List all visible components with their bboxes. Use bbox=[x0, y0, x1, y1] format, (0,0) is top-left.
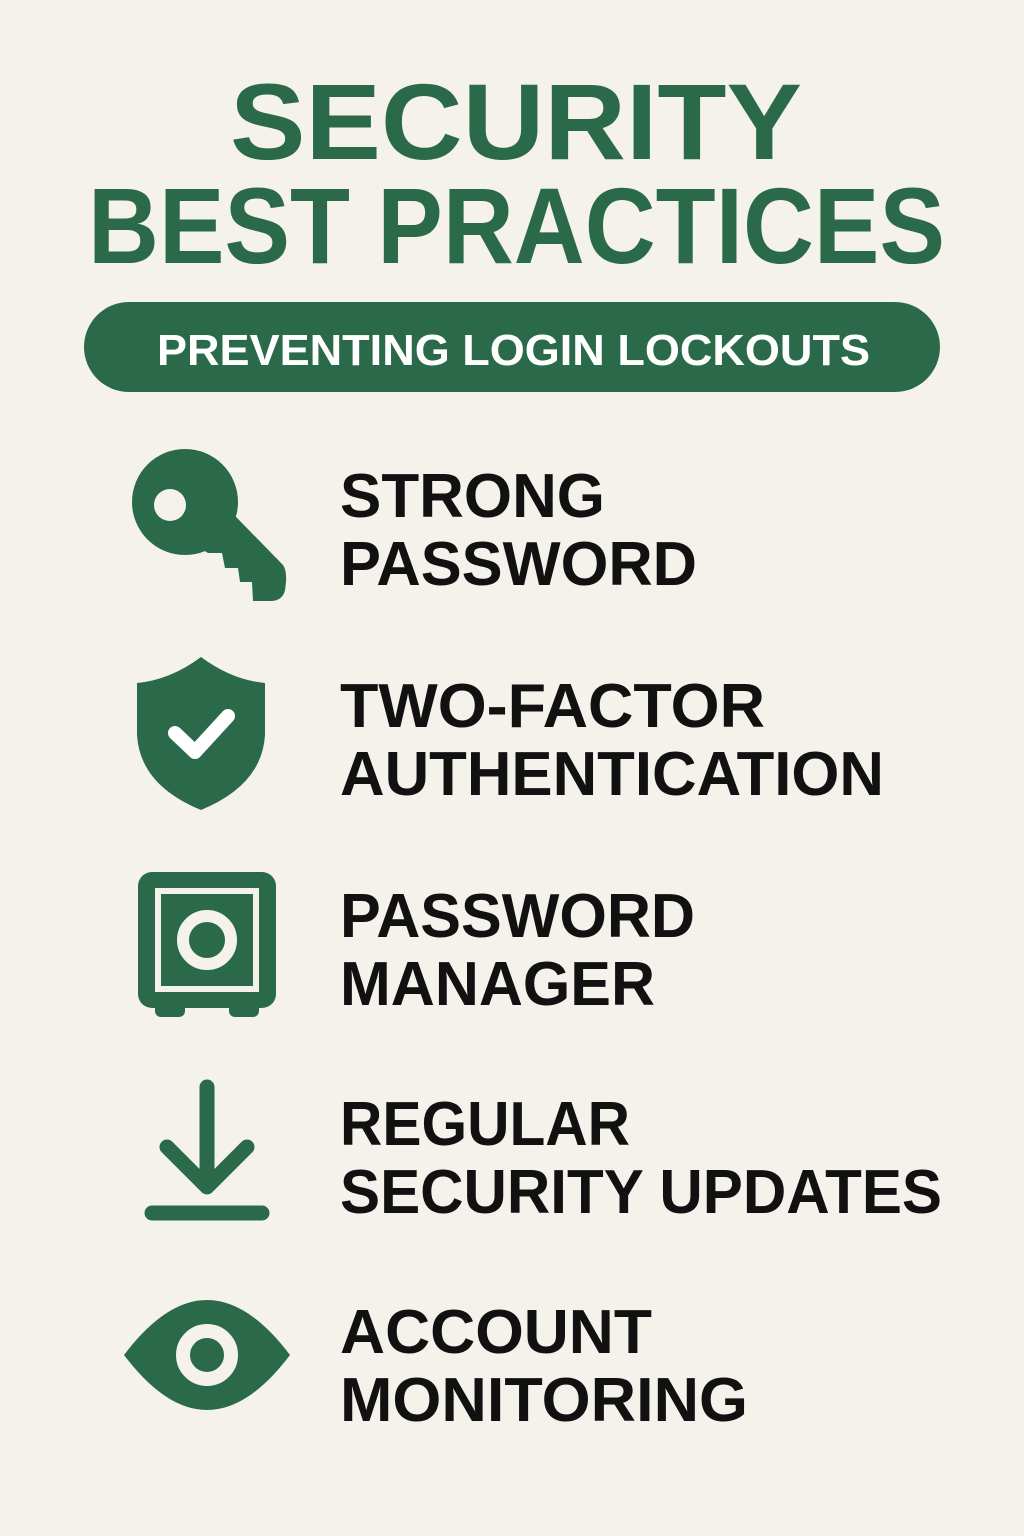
label: MONITORING bbox=[340, 1366, 748, 1435]
title bbox=[88, 61, 945, 286]
icon: shield with check bbox=[137, 657, 265, 810]
title: BEST PRACTICES bbox=[88, 165, 945, 286]
label: AUTHENTICATION bbox=[340, 740, 884, 809]
subtitle pill: PREVENTING LOGIN LOCKOUTS bbox=[157, 326, 870, 375]
icon: eye bbox=[124, 1300, 290, 1410]
item: two-factor authentication bbox=[137, 657, 884, 810]
item: password manager bbox=[138, 872, 695, 1019]
label bbox=[340, 1298, 748, 1435]
label: TWO-FACTOR bbox=[340, 672, 765, 741]
label: MANAGER bbox=[340, 950, 655, 1019]
label bbox=[340, 462, 697, 599]
label: STRONG bbox=[340, 462, 605, 531]
label: PASSWORD bbox=[340, 530, 697, 599]
label bbox=[340, 672, 884, 809]
item: account monitoring bbox=[124, 1298, 748, 1435]
label: ACCOUNT bbox=[340, 1298, 652, 1367]
label bbox=[340, 1090, 942, 1227]
subtitle pill bbox=[84, 302, 940, 392]
item: strong password bbox=[132, 449, 697, 601]
label: REGULAR bbox=[340, 1090, 630, 1159]
label bbox=[340, 882, 695, 1019]
icon: safe bbox=[138, 872, 276, 1017]
item: regular security updates bbox=[152, 1087, 942, 1227]
label: PASSWORD bbox=[340, 882, 695, 951]
title: SECURITY bbox=[230, 61, 802, 182]
icon: key bbox=[132, 449, 286, 601]
icon: download arrow bbox=[152, 1087, 262, 1213]
label: SECURITY UPDATES bbox=[340, 1158, 942, 1227]
